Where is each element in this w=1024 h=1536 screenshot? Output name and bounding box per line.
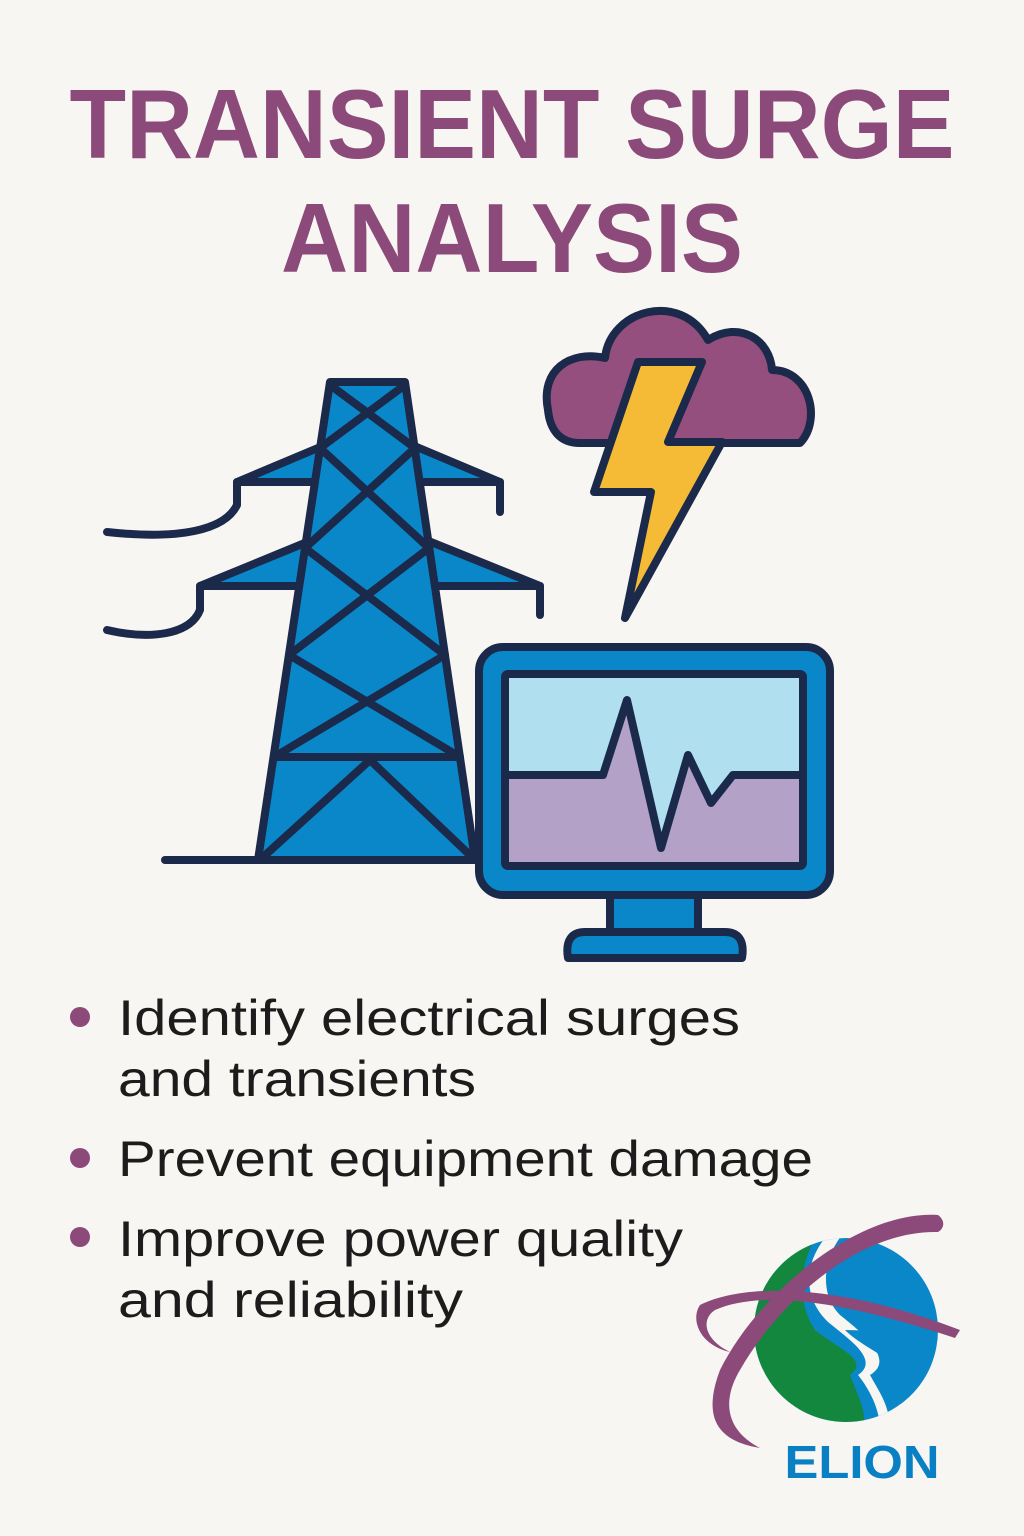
icon: storm cloud [547, 311, 811, 618]
icon: lightning bolt [594, 362, 722, 618]
bullet 3 [70, 1211, 683, 1328]
bullet 1: Identify electrical surges [118, 990, 740, 1046]
bullet 3: and reliability [118, 1272, 463, 1328]
title: ANALYSIS [281, 183, 743, 293]
bullet 1: and transients [118, 1051, 476, 1107]
bullet 3: Improve power quality [118, 1211, 683, 1267]
logo: ELION [696, 1215, 960, 1488]
icon: transmission tower [107, 382, 540, 860]
bullet 1 [70, 990, 740, 1107]
title [70, 69, 954, 293]
icon: monitor with surge waveform [479, 647, 830, 958]
bullet list [70, 990, 813, 1328]
title: TRANSIENT SURGE [70, 69, 954, 179]
logo: ELION: ELION [784, 1436, 940, 1488]
bullet 2: Prevent equipment damage [118, 1131, 813, 1187]
